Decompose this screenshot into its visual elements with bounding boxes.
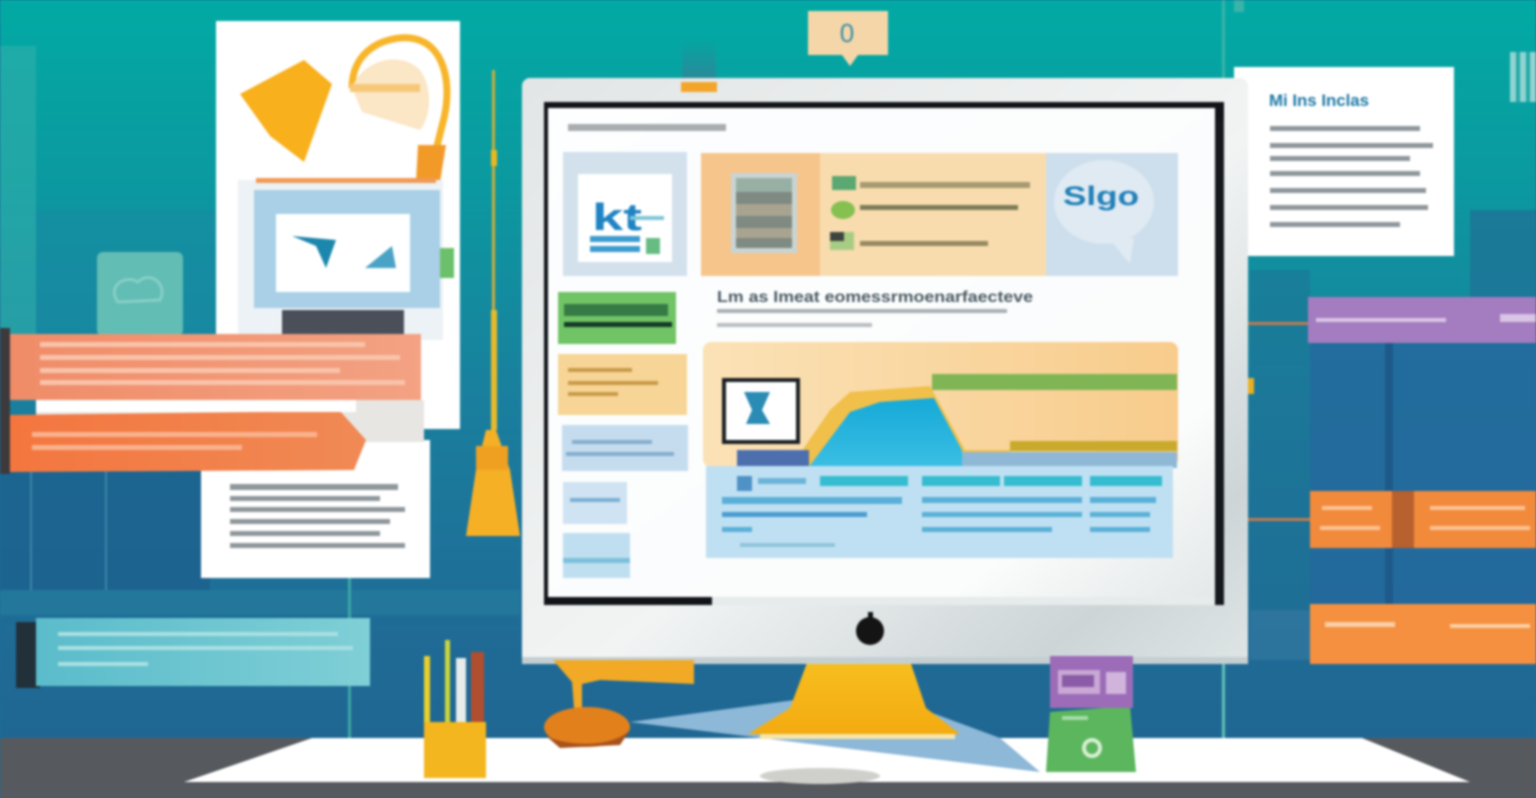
blue side card	[562, 425, 688, 471]
hanging tassel	[466, 70, 520, 536]
peach feature panel	[701, 153, 1178, 276]
icon: desk lamp	[240, 38, 447, 182]
monitor	[522, 78, 1248, 739]
banner: orange arrow	[10, 400, 366, 472]
icon: stand under monitor	[544, 660, 694, 748]
top icon: speech tag: 0	[840, 18, 854, 48]
lamp note card	[216, 21, 460, 429]
desk	[0, 690, 1536, 798]
main chart panel	[703, 342, 1178, 558]
screen header	[568, 124, 726, 131]
heading text	[717, 289, 1033, 327]
speech bubble: Slgo	[1063, 181, 1139, 211]
monitor screen	[544, 102, 1224, 605]
right banner: orange bottom	[1310, 604, 1536, 664]
right banner: purple	[1308, 297, 1536, 343]
small blue card 2	[563, 533, 630, 578]
table	[706, 466, 1173, 558]
peach side card	[558, 354, 687, 415]
speech bubble	[1054, 160, 1154, 264]
heading text: Lm as Imeat eomessrmoenarfaecteve	[717, 289, 1033, 306]
small blue card	[563, 482, 627, 524]
pencil cup	[424, 640, 486, 778]
icon: cloud	[114, 277, 162, 302]
green book	[1046, 656, 1136, 772]
thumbnail card	[563, 152, 687, 276]
document bottom left	[201, 440, 430, 578]
banner: teal	[16, 618, 370, 688]
logo	[856, 612, 884, 645]
top connector	[681, 40, 717, 92]
right accent	[1248, 322, 1310, 521]
list rows	[832, 176, 856, 190]
monitor stand	[748, 655, 960, 739]
green button	[558, 292, 676, 344]
top icon: speech tag	[808, 11, 888, 66]
document top right: Mi Ins Inclas	[1269, 91, 1369, 110]
monitor bezel	[522, 78, 1248, 664]
right banner: orange top	[1310, 491, 1536, 548]
printer	[97, 178, 454, 340]
chart icon	[722, 378, 800, 444]
document top right	[1234, 67, 1454, 256]
thumbnail card: kt	[592, 197, 642, 239]
document icon	[731, 173, 797, 253]
banner: salmon	[0, 328, 424, 474]
